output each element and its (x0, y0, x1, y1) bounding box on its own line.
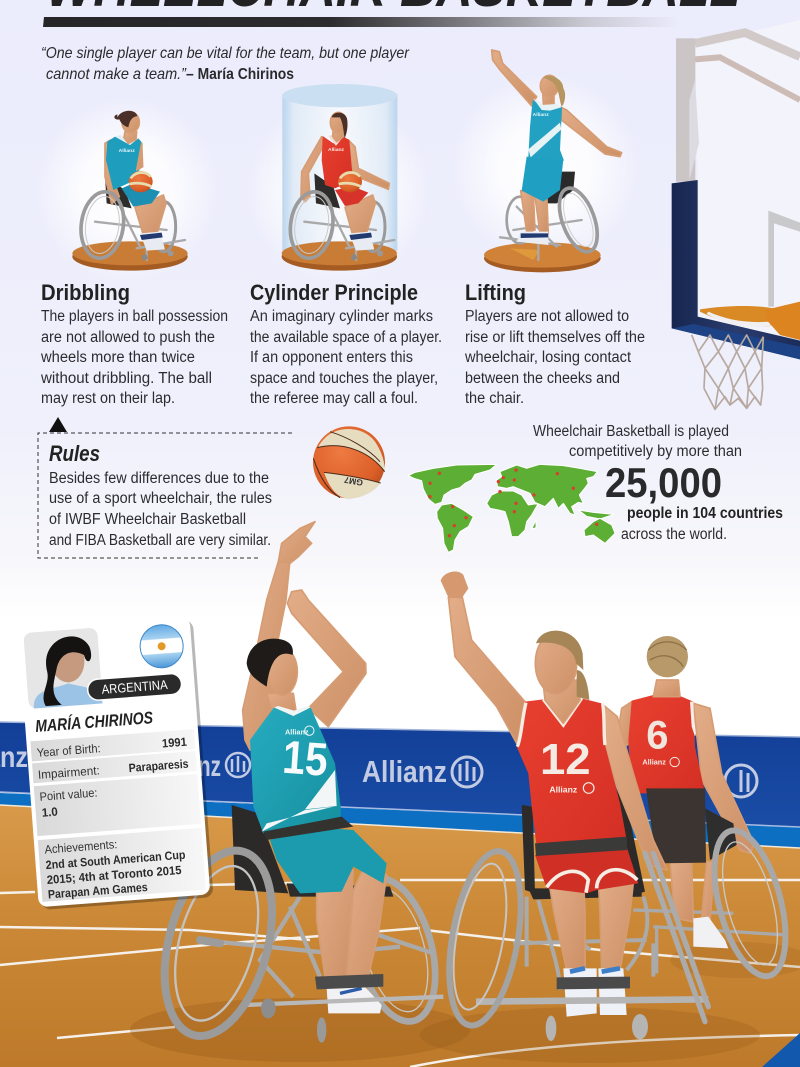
quote (41, 45, 410, 83)
statistic text: competitively by more than (569, 443, 742, 460)
player 15: teal jersey: Allianz (285, 727, 309, 736)
achievements row: Parapan Am Games (47, 880, 148, 901)
sponsor logos on banner: Allianz (362, 754, 447, 789)
rules box (38, 417, 292, 558)
text: lifting (464, 280, 645, 407)
rules box: of IWBF Wheelchair Basketball (49, 511, 246, 528)
country pill (87, 673, 182, 701)
illustration: cylinder principle player: Allianz (328, 147, 345, 153)
statistic text: across the world. (621, 526, 727, 543)
sponsor logos on banner: nz (198, 750, 221, 783)
text: cylinder principle (250, 280, 442, 407)
text: dribbling (40, 280, 228, 407)
world map (408, 464, 615, 552)
net (692, 335, 763, 409)
achievements row (38, 828, 206, 902)
text: dribbling: The players in ball possession (41, 308, 228, 325)
statistic text (533, 423, 783, 543)
text: cylinder principle: the referee may call a foul. (250, 390, 418, 407)
text: cylinder principle: the available space of a player. (250, 329, 442, 346)
text: lifting: Lifting (465, 280, 526, 305)
name: MARÍA CHIRINOS (35, 708, 154, 736)
text: cylinder principle: If an opponent enters this (250, 349, 413, 366)
illustration: lifting player: Allianz (533, 112, 549, 118)
statistic text: people in 104 countries (627, 505, 783, 522)
year of birth row: 1991 (161, 735, 188, 751)
quote: “One single player can be vital for the team, but one player (41, 45, 410, 62)
text: dribbling: Dribbling (41, 280, 130, 305)
player 6: back view: 6 (646, 713, 668, 757)
year of birth row: Year of Birth: (36, 741, 101, 760)
text: cylinder principle: space and touches the player, (250, 370, 438, 387)
illustration: cylinder principle player (282, 84, 397, 271)
portrait (23, 628, 103, 709)
icon: basketball: GM7 (343, 475, 364, 488)
text: cylinder principle: Cylinder Principle (250, 280, 418, 305)
text: lifting: Players are not allowed to (465, 308, 629, 325)
quote: – María Chirinos (186, 66, 294, 83)
player 12: red jersey: Allianz (549, 785, 578, 795)
rules box: use of a sport wheelchair, the rules (49, 490, 272, 507)
sponsor logos on banner (0, 741, 757, 797)
point value row: Point value: (39, 786, 98, 804)
text: lifting: rise or lift themselves off the (465, 329, 645, 346)
title (43, 0, 740, 27)
impairment row (32, 751, 197, 783)
rules box: Besides few differences due to the (49, 470, 269, 487)
icon: basketball (313, 426, 385, 498)
year of birth row (30, 729, 195, 761)
point value row: 1.0 (41, 805, 59, 820)
achievements row: Achievements: (44, 837, 118, 857)
player 15: teal jersey: 15 (281, 731, 329, 786)
quote: cannot make a team.” (46, 66, 187, 83)
achievements row: 2nd at South American Cup (45, 848, 186, 872)
player 6: back view: Allianz (642, 757, 666, 766)
text: lifting: the chair. (465, 390, 524, 407)
impairment row: Impairment: (37, 763, 100, 782)
text: dribbling: are not allowed to push the (41, 329, 215, 346)
illustration: lifting player (484, 50, 622, 272)
player 6: back view (619, 636, 799, 984)
impairment row: Paraparesis (128, 757, 189, 775)
statistic text: 25,000 (605, 459, 722, 506)
player card: María Chirinos (18, 617, 214, 910)
rules box: and FIBA Basketball are very similar. (49, 532, 271, 549)
player 12: red jersey (437, 571, 708, 1041)
text: cylinder principle: An imaginary cylinder marks (250, 308, 433, 325)
text: dribbling: may rest on their lap. (41, 390, 175, 407)
text: dribbling: without dribbling. The ball (40, 370, 212, 387)
country pill: ARGENTINA (101, 677, 168, 697)
glow backgrounds (35, 74, 639, 282)
text: lifting: between the cheeks and (465, 370, 620, 387)
player 15: teal jersey (146, 522, 449, 1048)
scene: sponsor banner and court floor (0, 722, 800, 1067)
illustration: dribbling player: Allianz (119, 148, 135, 154)
illustration: dribbling player (72, 111, 188, 271)
rules box: Rules (49, 441, 100, 466)
statistic text: Wheelchair Basketball is played (533, 423, 729, 440)
text: dribbling: wheels more than twice (40, 349, 195, 366)
flag: Argentina (139, 623, 185, 669)
player 12: red jersey: 12 (540, 736, 591, 784)
basketball hoop and backboard (672, 20, 800, 409)
achievements row: 2015; 4th at Toronto 2015 (46, 863, 182, 887)
point value row (34, 774, 201, 836)
text: lifting: wheelchair, losing contact (464, 349, 632, 366)
